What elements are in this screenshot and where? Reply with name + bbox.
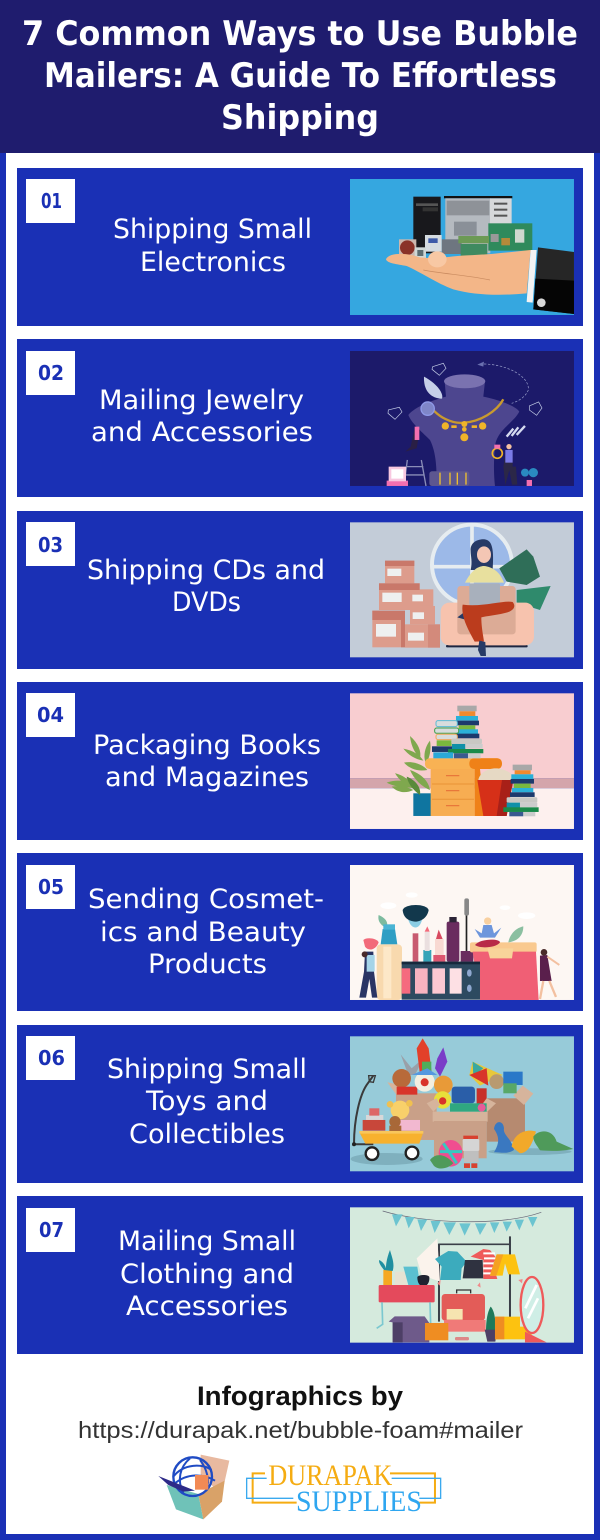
wordmark (247, 1459, 441, 1518)
heading 05: Products (148, 949, 267, 980)
number badge 01: 01 (41, 189, 62, 213)
credit heading: Infographics by (197, 1381, 403, 1411)
icon: hand holding electronics (350, 179, 574, 315)
heading 06 (107, 1054, 307, 1150)
number badge 06 (26, 1036, 75, 1080)
heading 07: Clothing and (120, 1259, 294, 1290)
heading 01 (113, 214, 312, 278)
icon: clothes rack and bunting (350, 1207, 574, 1343)
title: 7 Common Ways to Use Bubble (22, 14, 578, 54)
heading 06: Shipping Small (107, 1054, 307, 1085)
icon: cosmetics (350, 865, 574, 1000)
icon: woman with laptop and boxes (350, 522, 574, 657)
title (0, 0, 600, 153)
number badge 03: 03 (38, 533, 63, 557)
number badge 01 (26, 179, 75, 223)
number badge 07 (26, 1208, 75, 1252)
number badge 04: 04 (37, 703, 64, 727)
heading 05 (88, 884, 324, 980)
heading 06: Collectibles (129, 1119, 285, 1150)
title: Shipping (221, 98, 379, 138)
icon: books, dresser and plant (350, 693, 574, 829)
heading 05: ics and Beauty (100, 917, 306, 948)
icon: necklace on bust (350, 351, 574, 486)
panel: 02 jewelry (17, 339, 583, 497)
heading 07: Accessories (126, 1291, 288, 1322)
heading 06: Toys and (145, 1086, 268, 1117)
panel: 03 CDs and DVDs (17, 511, 583, 669)
number badge 04 (26, 693, 75, 737)
source url: https://durapak.net/bubble-foam#mailer (78, 1417, 523, 1443)
number badge 06: 06 (38, 1046, 65, 1070)
number badge 02 (26, 351, 75, 395)
heading 02: Mailing Jewelry (99, 385, 304, 416)
icon: box of toys and wagon (350, 1036, 574, 1171)
heading 03 (87, 555, 325, 618)
panel: 05 cosmetics (17, 853, 583, 1011)
heading 01: Electronics (140, 247, 286, 278)
heading 07: Mailing Small (118, 1226, 296, 1257)
heading 05: Sending Cosmet- (88, 884, 324, 915)
panel: 04 books and magazines (17, 682, 583, 840)
number badge 07: 07 (39, 1218, 64, 1242)
title: Mailers: A Guide To Effortless (44, 56, 557, 96)
wordmark: SUPPLIES (296, 1485, 422, 1518)
number badge 05: 05 (38, 875, 64, 899)
heading 07 (118, 1226, 296, 1322)
wordmark: DURAPAK (268, 1459, 393, 1492)
heading 03: Shipping CDs and (87, 555, 325, 586)
number badge 03 (26, 522, 75, 566)
heading 04: and Magazines (105, 762, 309, 793)
heading 04: Packaging Books (93, 730, 321, 761)
number badge 05 (26, 865, 75, 909)
heading 04 (93, 730, 321, 793)
panel: 01 small electronics (17, 168, 583, 326)
heading 02: and Accessories (91, 417, 313, 448)
number badge 02: 02 (38, 361, 64, 385)
logo (158, 1455, 441, 1519)
panel: 07 clothing (17, 1196, 583, 1354)
heading 02 (91, 385, 313, 448)
icon: globe box (158, 1455, 229, 1519)
heading 03: DVDs (172, 587, 241, 618)
panel: 06 toys (17, 1025, 583, 1183)
heading 01: Shipping Small (113, 214, 312, 245)
